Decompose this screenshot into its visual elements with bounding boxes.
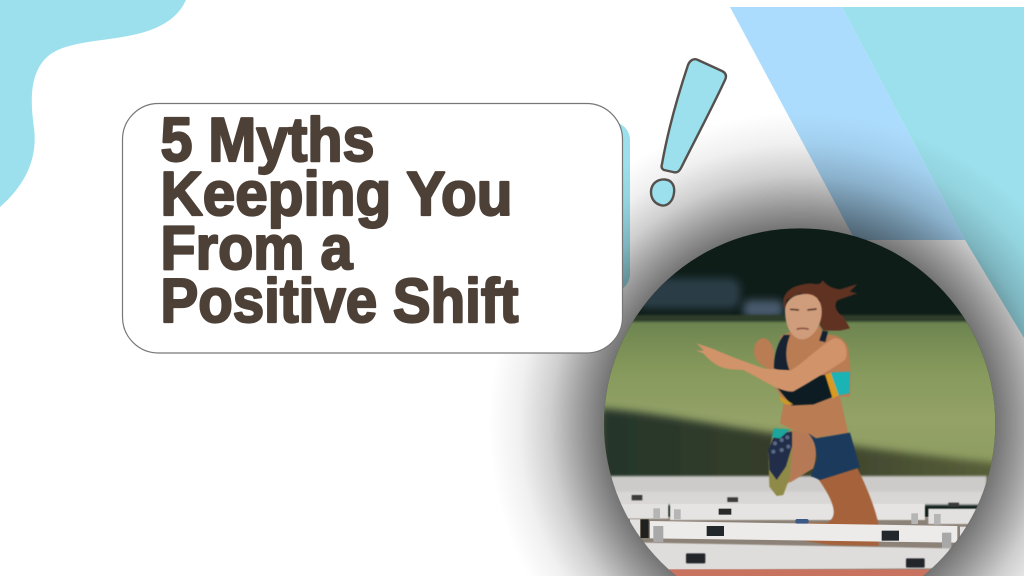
title: Positive Shift: [160, 267, 518, 336]
title: [160, 106, 518, 336]
front hurdle bar: [650, 519, 957, 549]
athlete: shoe: [768, 428, 792, 496]
title panel: [122, 104, 622, 353]
athlete: raised thigh: [787, 430, 816, 483]
athlete: face: [785, 294, 822, 339]
track background: [600, 220, 1000, 576]
athlete: shorts: [808, 433, 860, 480]
title box accent: [560, 122, 630, 292]
athlete: leading arm: [696, 338, 847, 392]
title: Keeping You: [160, 160, 512, 229]
athlete: rear leg: [797, 467, 879, 546]
athlete: top: [774, 331, 850, 405]
athlete: hair: [783, 280, 857, 331]
photo drop shadow: [480, 110, 1024, 576]
athlete: neck and chest: [754, 327, 851, 438]
geometric shapes: top right: [730, 7, 1024, 338]
photo: hurdler: [600, 220, 1000, 576]
decorative blob: top left: [0, 0, 186, 207]
hurdles: [600, 476, 1000, 576]
title: From a: [160, 214, 353, 283]
title: 5 Myths: [160, 106, 374, 175]
second hurdle bar: [643, 543, 950, 576]
icon: exclamation mark: [651, 59, 726, 206]
